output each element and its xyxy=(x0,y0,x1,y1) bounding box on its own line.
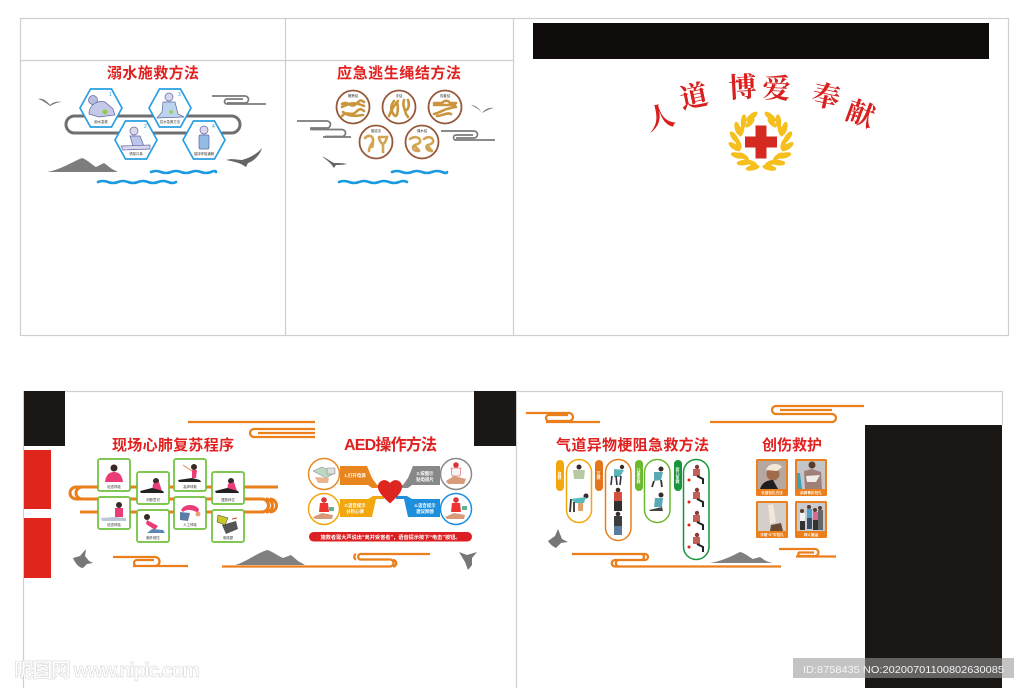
card 7 xyxy=(174,497,206,529)
slogan text: 人 xyxy=(644,100,678,137)
knot circle 1: 猪蹄结 xyxy=(348,93,359,98)
card 4 xyxy=(212,472,244,504)
orange cloud top left xyxy=(526,413,600,422)
label 3: 儿童急救 xyxy=(636,466,642,484)
banner 1 xyxy=(340,466,384,488)
panel: bottom wall outline xyxy=(24,391,1002,688)
label 3 xyxy=(635,460,643,491)
knot circle 3: 双套结 xyxy=(440,93,451,98)
heading: knots: 应急逃生绳结方法 xyxy=(337,64,461,82)
pill 4 xyxy=(684,460,709,560)
grey track xyxy=(66,116,240,133)
panel: trauma rescue xyxy=(756,436,836,556)
card 6: 胸外按压 xyxy=(146,535,160,540)
banner 1: 1.打开电源 xyxy=(344,472,366,479)
banner 3 xyxy=(340,496,384,517)
knot circle 4: 普结法 xyxy=(371,128,382,133)
panel: CPR xyxy=(70,422,315,568)
hexagon step 4 xyxy=(183,121,225,159)
card 8: 电除颤 xyxy=(223,535,234,540)
photo card 4: 四人搬运 xyxy=(804,532,819,537)
swallow xyxy=(459,552,477,570)
label 1: 自救 xyxy=(558,470,562,480)
mountains xyxy=(710,552,772,563)
orange cloud bottom xyxy=(113,557,188,566)
waves xyxy=(98,171,216,183)
banner 2: 2.按图示 xyxy=(417,470,434,477)
circle 2 xyxy=(440,458,472,490)
warning bar xyxy=(309,532,472,542)
banner 2: 贴电极片 xyxy=(416,476,434,483)
card 6 xyxy=(137,510,169,542)
knot circle 2: 手结 xyxy=(396,93,403,98)
cloud lines xyxy=(212,96,266,104)
bird lower xyxy=(322,156,347,168)
mountains middle xyxy=(235,550,305,565)
card 7: 人工呼吸 xyxy=(183,522,197,527)
pill 3 xyxy=(644,460,670,522)
hexagon step 2: 2 xyxy=(144,124,147,130)
panel: AED xyxy=(308,435,477,570)
hexagon step 3: 3 xyxy=(178,92,181,98)
orange cloud top xyxy=(188,422,315,437)
circle 4 xyxy=(440,494,472,524)
swallow xyxy=(73,549,93,568)
photo card 2: 前臂骨折包扎 xyxy=(800,490,822,495)
hexagon step 3 xyxy=(149,89,191,127)
card 1 xyxy=(98,459,130,491)
banner 3: 分析心律 xyxy=(346,508,364,515)
hexagon step 1: 1 xyxy=(109,92,112,98)
slogan text: 奉 xyxy=(809,79,843,116)
swallow xyxy=(548,529,568,548)
slogan text: 博 xyxy=(728,71,757,105)
pill 1 xyxy=(566,460,592,522)
panel: knots xyxy=(297,64,495,183)
icon: heart xyxy=(378,480,402,504)
card 2 xyxy=(137,472,169,504)
orange cloud long xyxy=(222,554,430,566)
black corner block right xyxy=(474,391,516,446)
pill 2 xyxy=(606,460,631,540)
circle 1 xyxy=(308,458,340,490)
orange cloud xyxy=(779,549,836,556)
bird large xyxy=(226,148,262,167)
card 1: 检查呼吸 xyxy=(107,484,121,489)
watermark: logo text: 昵图网 www.nipic.com xyxy=(14,660,200,682)
panel: top wall outline xyxy=(20,18,1008,336)
banner 3: 3.语音提示 xyxy=(344,502,366,509)
knot circle 1 xyxy=(336,90,370,124)
hexagon step 3: 控水急救方法 xyxy=(160,119,181,124)
card 3 xyxy=(174,459,206,491)
heading: CPR: 现场心肺复苏程序 xyxy=(112,436,234,454)
photo card 3: 手臂“8”字包扎 xyxy=(760,532,784,537)
label 2: 互救 xyxy=(596,471,602,480)
slogan text: 爱 xyxy=(761,72,791,106)
banner 4: 4.语音提示 xyxy=(414,502,436,509)
black corner block left xyxy=(24,391,65,446)
card 3: 高声呼救 xyxy=(183,484,197,489)
bird right xyxy=(471,105,494,113)
hexagon step 1 xyxy=(80,89,122,127)
card 2: 判断意识 xyxy=(146,497,160,502)
hexagon step 4: 4 xyxy=(212,124,215,130)
icon: wreath emblem xyxy=(727,110,795,172)
hexagon step 1: 倒水急救 xyxy=(94,119,108,124)
slogan text: 献 xyxy=(841,95,881,135)
cloud right xyxy=(441,131,495,140)
banner 2 xyxy=(396,466,440,488)
label 4 xyxy=(674,460,682,491)
bird xyxy=(38,99,62,106)
card 8 xyxy=(212,510,244,542)
red block lower xyxy=(24,518,51,578)
label 4: 婴儿急救 xyxy=(676,467,680,484)
slogan text: 道 xyxy=(677,79,711,116)
knot circle 4 xyxy=(360,126,392,158)
knot circle 5 xyxy=(406,126,438,158)
hexagon step 2 xyxy=(115,121,157,159)
orange cloud top right xyxy=(710,406,864,422)
mountains xyxy=(47,158,118,172)
heading: AED: AED操作方法 xyxy=(344,435,437,454)
heading: trauma: 创伤救护 xyxy=(762,436,822,454)
orange cloud bottom xyxy=(572,554,781,566)
label 2 xyxy=(595,460,603,491)
banner 4 xyxy=(396,496,440,517)
black block right xyxy=(865,425,1002,688)
cloud left xyxy=(297,121,351,137)
heading: drowning rescue: 溺水施救方法 xyxy=(107,64,199,82)
hexagon step 4: 保持呼吸通畅 xyxy=(194,151,215,156)
red block upper xyxy=(24,450,51,509)
knot circle 2 xyxy=(382,90,416,124)
photo card 1: 头部包扎方法 xyxy=(761,490,783,495)
panel: drowning rescue xyxy=(38,64,266,183)
card 5 xyxy=(98,497,130,529)
heading: airway: 气道异物梗阻急救方法 xyxy=(556,436,709,454)
orange band xyxy=(70,487,278,512)
black header bar xyxy=(533,23,989,59)
hexagon step 2: 清除口鼻 xyxy=(129,151,143,156)
label 1 xyxy=(556,460,564,491)
panel: airway obstruction xyxy=(526,406,864,566)
waves xyxy=(339,171,447,183)
slogan text xyxy=(644,71,881,137)
watermark: image id: ID:8758435 NO:20200701100802630085 xyxy=(803,664,1004,676)
circle 3 xyxy=(308,494,340,524)
knot circle 3 xyxy=(428,90,462,124)
card 4: 摆放体位 xyxy=(221,497,235,502)
watermark: image id xyxy=(793,658,1014,678)
card 5: 检查呼吸 xyxy=(107,522,121,527)
knot circle 5: 绳木结 xyxy=(417,128,428,133)
banner 4: 建议除颤 xyxy=(416,508,434,515)
panel: red cross slogan xyxy=(644,71,881,172)
warning bar: 施救者需大声说出“离开受害者”，语音提示按下“电击”按钮。 xyxy=(320,533,461,541)
